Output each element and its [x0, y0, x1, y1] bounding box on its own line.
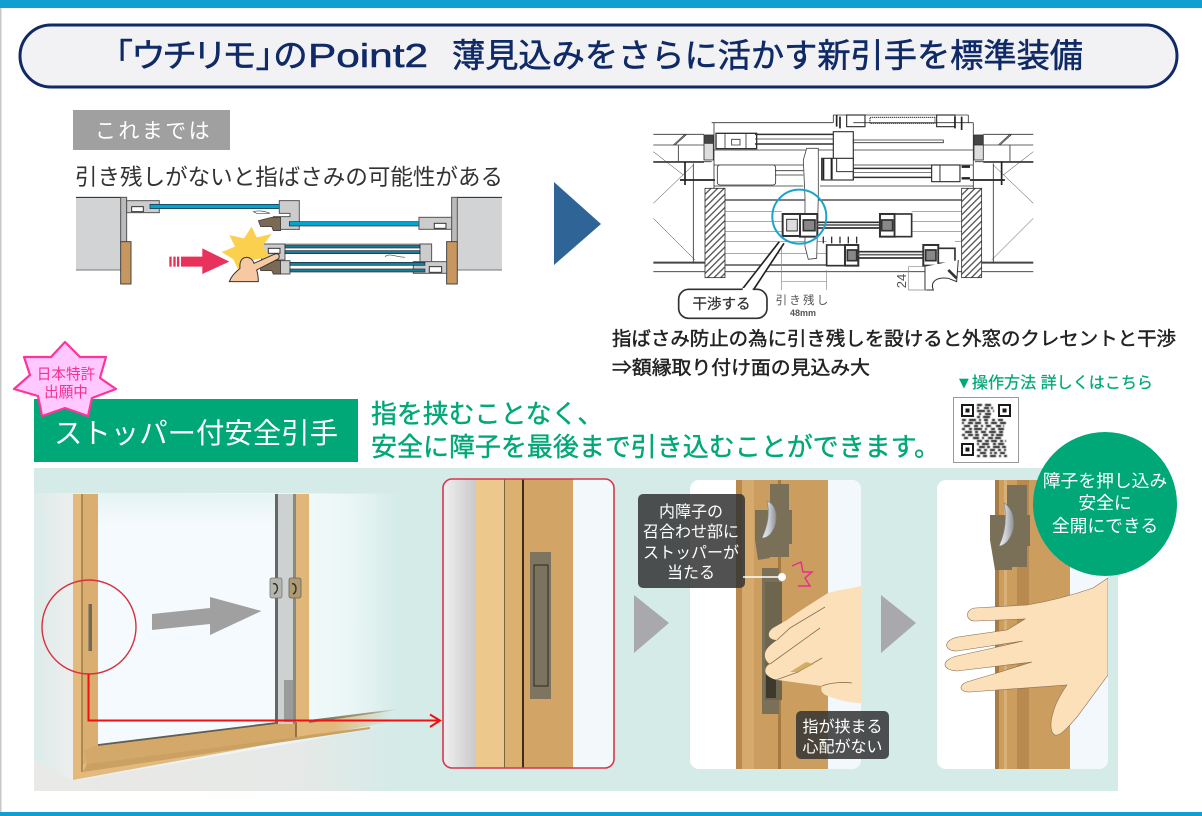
title banner: [20, 25, 1177, 87]
callout: no pinch worry: [796, 711, 889, 759]
title banner: 「ウチリモ」の: [115, 37, 307, 74]
callout wedge: [742, 242, 784, 290]
icon: push arrow: [169, 248, 229, 274]
movement arrow: [152, 597, 262, 635]
callout: no pinch worry: 心配がない: [802, 738, 883, 756]
glass: [309, 494, 400, 720]
highlight circle: [772, 190, 826, 244]
label: これまでは: これまでは: [95, 120, 212, 143]
hand: [765, 586, 861, 703]
hatched blocks: [705, 188, 725, 278]
callout circle: 全開: 全開にできる: [1052, 516, 1158, 536]
lower handle: [762, 568, 779, 714]
inner sashes: [783, 214, 800, 236]
upper sashes: [716, 133, 757, 149]
diagram: window section with finger pinch: [76, 197, 502, 284]
heading band: ストッパー付安全引手: [34, 399, 358, 462]
note: interference explanation: 指ばさみ防止の為に引き残しを設けると外窓のクレセントと干渉: [612, 328, 1176, 350]
heading band: ストッパー付安全引手: ストッパー付安全引手: [54, 418, 338, 450]
panel: teal illustration background: [34, 468, 1118, 791]
QR code: [954, 398, 1018, 462]
bottom rail: [84, 722, 296, 764]
arrow: red leader line: [88, 674, 440, 727]
callout circle: 全開: [1033, 432, 1177, 576]
callout: no pinch worry: 指が挟まる: [802, 718, 883, 736]
crescent locks: [270, 578, 282, 598]
title banner: 薄見込みをさらに活かす新引手を標準装備: [452, 37, 1083, 74]
dimension: 24: 24: [894, 274, 909, 288]
callout: stopper note: 内障子の: [659, 503, 723, 521]
latch: [755, 484, 792, 560]
photo: fully open with pushing hand: [937, 480, 1108, 769]
callout text: 干渉する: 干渉する: [692, 296, 750, 313]
icon: pinched finger: [229, 254, 279, 282]
wall lines: [653, 134, 1033, 162]
callout circle: 全開: 障子を押し込み: [1043, 471, 1167, 491]
caption: finger pinch risk: 引き残しがないと指ばさみの可能性がある: [75, 165, 503, 190]
headline: safety message: 指を挟むことなく、: [371, 400, 603, 429]
callout: stopper note: 当たる: [667, 564, 715, 582]
top frame: [712, 115, 973, 188]
highlight circle: [42, 580, 136, 674]
detail: handle close-up: [443, 479, 614, 768]
callout: stopper note: ストッパーが: [643, 544, 739, 562]
headline: safety message: [371, 400, 940, 462]
headline: safety message: 安全に障子を最後まで引き込むことができます。: [371, 433, 940, 462]
note: interference explanation: ⇒額縁取り付け面の見込み大: [612, 357, 870, 379]
handle: [88, 604, 92, 651]
label: これまでは: [73, 110, 230, 150]
callout: stopper note: 召合わせ部に: [643, 523, 739, 541]
link text: 操作方法: ▼操作方法 詳しくはこちら: [956, 374, 1153, 392]
dimension lines: [782, 243, 927, 290]
diagram: technical section drawing: [653, 115, 1033, 318]
hand: [945, 578, 1108, 735]
note: interference explanation: [612, 328, 1176, 379]
latch: [990, 485, 1030, 570]
arrow: before to after: [554, 182, 601, 265]
icon: impact burst: [222, 227, 272, 273]
arrow: step 2: [881, 595, 916, 653]
callout: stopper note: [638, 494, 786, 588]
sash: [275, 494, 278, 724]
arrow: step 1: [634, 595, 669, 653]
lower lines: [725, 212, 962, 253]
badge: 日本特許出願中: [14, 342, 116, 416]
callout circle: 全開: 安全に: [1078, 493, 1132, 513]
wall area: [34, 493, 400, 791]
illustration: window with sliding sash: [34, 493, 400, 791]
title banner: Point2: [308, 37, 428, 74]
badge: 日本特許出願中: 出願中: [44, 384, 88, 401]
icon: impact mark: [792, 562, 812, 586]
dimension: 引き残し: 引き残し: [776, 293, 830, 307]
photo: stopper hitting meeting rail: [690, 480, 861, 769]
vertical crescent handle: [803, 148, 818, 259]
outer frame and sill: [73, 494, 390, 780]
dimension: 48mm: 48mm: [790, 308, 816, 318]
callout box: [679, 289, 767, 318]
badge: 日本特許出願中: 日本特許: [37, 366, 96, 383]
